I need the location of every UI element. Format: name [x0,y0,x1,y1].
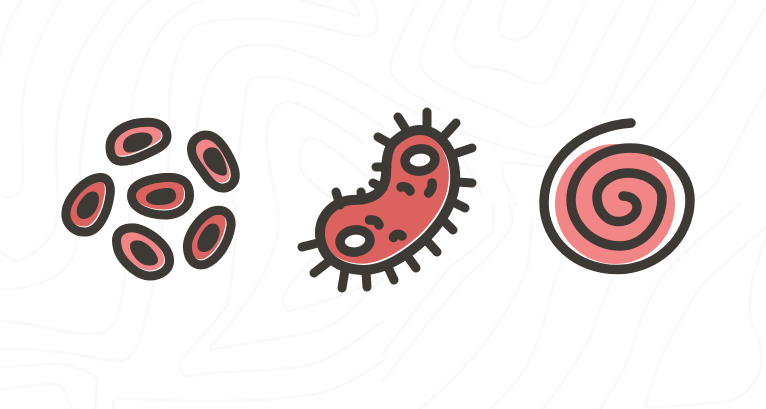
cell: center [130,176,190,215]
cell: bottom [116,227,170,276]
icon: rod bacterium with spikes [302,112,472,288]
body fill [320,130,455,270]
granules [370,183,432,238]
icon: spiral bacterium [544,123,690,270]
vacuole: lower [339,228,371,254]
body outline [320,130,455,270]
cell: bottom right [186,209,231,265]
icon: cocci cell cluster [65,121,235,276]
spiral backing disc [555,144,675,264]
cell: top right [190,134,235,188]
cell: top [109,121,167,161]
vacuole: upper [404,147,436,173]
cell: left [65,176,110,232]
spiral line [544,123,690,270]
spikes [302,112,472,288]
